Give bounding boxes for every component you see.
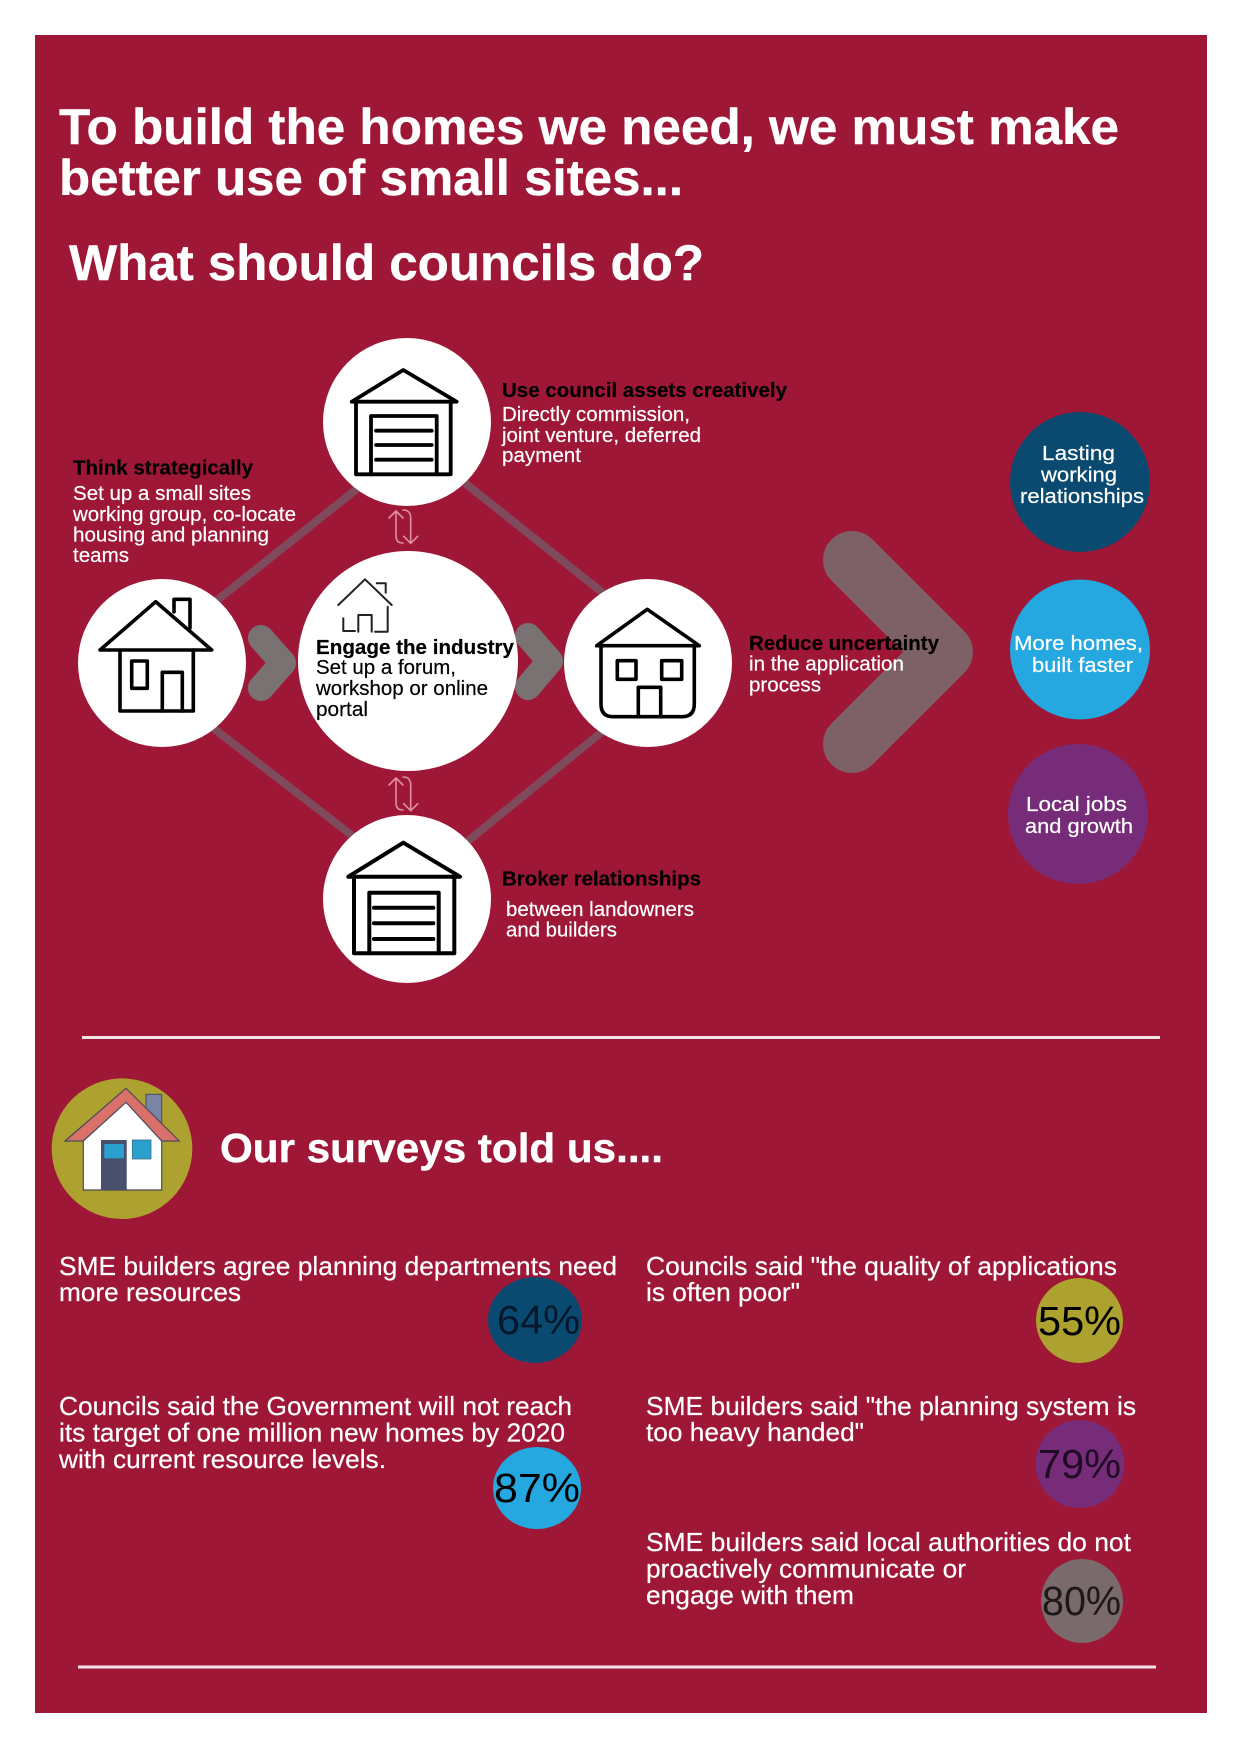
icon: top garage <box>352 370 457 474</box>
outcome: local jobs and growth <box>1008 744 1148 884</box>
title: better use of small sites... <box>59 150 683 206</box>
stat text: heavy handed: too heavy handed" <box>646 1417 864 1447</box>
circle: left <box>78 579 246 747</box>
outcome: lasting working relationships: relationships <box>1020 485 1144 508</box>
stat: 64% <box>488 1277 582 1363</box>
stat text: government target: its target of one million new homes by 2020 <box>59 1418 565 1448</box>
text: use council assets: payment <box>502 444 581 467</box>
title <box>59 99 1119 206</box>
text: think strategically <box>72 456 296 567</box>
stat text: proactively communicate: engage with them <box>646 1580 854 1610</box>
text: think strategically: Think strategically <box>73 456 254 480</box>
stat text: government target: with current resource levels. <box>58 1444 386 1474</box>
text: think strategically: Set up a small sites <box>73 482 251 505</box>
text: engage the industry: portal <box>316 698 368 721</box>
text: broker relationships <box>502 868 701 942</box>
stat: 55%: 55% <box>1038 1298 1121 1344</box>
stat text: planning resources: more resources <box>59 1277 241 1307</box>
text: think strategically: teams <box>73 544 129 567</box>
stat: 55% <box>1036 1278 1123 1363</box>
outcome: lasting working relationships <box>1010 412 1150 552</box>
stat: 64%: 64% <box>497 1297 580 1343</box>
outcome: more homes built faster: built faster <box>1032 654 1133 677</box>
icon: two-way arrow upper <box>389 510 418 543</box>
stat text: government target <box>58 1391 572 1474</box>
stat text: planning resources: SME builders agree planning departments need <box>59 1251 617 1281</box>
stat text: heavy handed <box>646 1391 1136 1447</box>
text: engage the industry: workshop or online <box>315 677 488 700</box>
icon: right house <box>597 609 699 717</box>
outcome: more homes built faster: More homes, <box>1014 632 1143 655</box>
text: think strategically: housing and planning <box>73 524 269 546</box>
stat text: proactively communicate: proactively communicate or <box>646 1554 966 1584</box>
diamond connector lines <box>213 483 603 841</box>
icon: two-way arrow lower <box>389 777 418 811</box>
text: broker relationships: and builders <box>506 918 617 942</box>
icon: bottom garage <box>348 843 460 953</box>
stat text: planning resources <box>59 1251 617 1307</box>
stat: 80% <box>1041 1559 1123 1643</box>
stat text: quality of applications: Councils said "the quality of applications <box>646 1251 1117 1281</box>
outcome: local jobs and growth: Local jobs <box>1026 793 1127 816</box>
stat text: heavy handed: SME builders said "the planning system is <box>646 1391 1136 1421</box>
text: broker relationships: Broker relationships <box>502 868 701 890</box>
text: think strategically: working group, co-locate <box>72 503 296 526</box>
outcome: local jobs and growth: and growth <box>1025 815 1133 838</box>
stat text: government target: Councils said the Government will not reach <box>59 1391 572 1421</box>
circle: top <box>323 338 491 506</box>
text: engage the industry: Set up a forum, <box>316 656 456 679</box>
text: engage the industry: Engage the industry <box>316 636 515 659</box>
circle: bottom <box>323 815 491 983</box>
circle: right <box>564 579 732 747</box>
stat text: quality of applications: is often poor" <box>646 1277 800 1307</box>
outcome: more homes built faster <box>1010 580 1150 720</box>
stat text: quality of applications <box>646 1251 1117 1307</box>
text: reduce uncertainty: in the application <box>749 652 904 676</box>
arrow: small chevron left <box>261 638 283 688</box>
outcome: lasting working relationships: working <box>1040 464 1117 486</box>
heading: what should councils do: What should councils do? <box>69 235 704 291</box>
icon: left house <box>100 599 212 711</box>
text: reduce uncertainty: process <box>749 674 821 696</box>
text: use council assets: Directly commission, <box>502 403 690 426</box>
icon: centre small house <box>338 579 392 632</box>
arrow: small chevron right <box>528 636 550 687</box>
stat text: proactively communicate: SME builders said local authorities do not <box>646 1527 1132 1557</box>
stat: 87%: 87% <box>494 1465 580 1511</box>
stat: 79%: 79% <box>1038 1441 1121 1487</box>
text: use council assets <box>501 379 788 467</box>
heading: our surveys: Our surveys told us.... <box>220 1125 663 1171</box>
stat: 87% <box>493 1447 581 1529</box>
text: engage the industry <box>315 636 515 721</box>
text: reduce uncertainty: Reduce uncertainty <box>749 632 940 655</box>
stat: 79% <box>1036 1420 1124 1508</box>
diagram: council actions <box>72 338 944 983</box>
text: use council assets: joint venture, deferred <box>501 424 701 447</box>
stat text: proactively communicate <box>646 1527 1132 1610</box>
icon: survey house badge <box>52 1078 192 1219</box>
text: broker relationships: between landowners <box>506 898 694 921</box>
outcome: lasting working relationships: Lasting <box>1042 442 1115 465</box>
circle: centre <box>298 551 518 771</box>
text: reduce uncertainty <box>749 632 940 696</box>
text: use council assets: Use council assets creatively <box>502 379 788 402</box>
arrow: large chevron <box>852 560 944 744</box>
stat: 80%: 80% <box>1042 1578 1121 1624</box>
title: To build the homes we need, we must make <box>59 99 1119 155</box>
